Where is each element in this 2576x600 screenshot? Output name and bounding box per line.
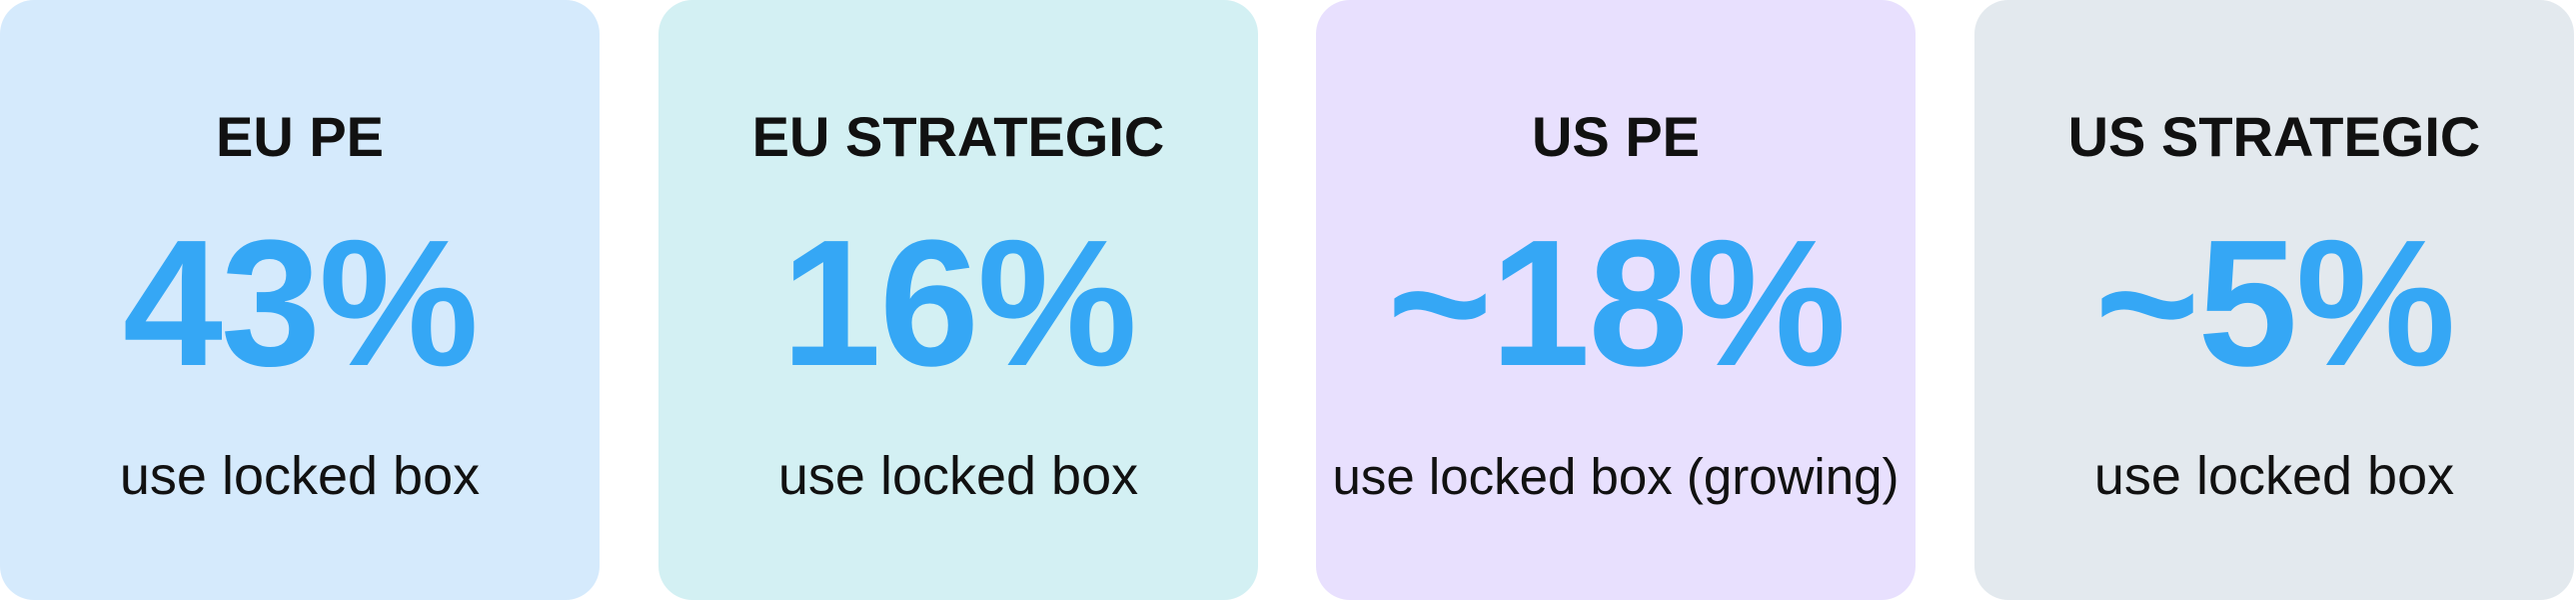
- heading: US STRATEGIC: US STRATEGIC: [2068, 105, 2480, 168]
- panel: US PE: [1316, 0, 1916, 600]
- text: use locked box: use locked box: [778, 446, 1138, 506]
- heading: EU PE: EU PE: [216, 105, 384, 168]
- stat: 16%: 16%: [781, 203, 1135, 404]
- text: use locked box: use locked box: [120, 446, 480, 506]
- text: use locked box (growing): use locked box (growing): [1333, 448, 1899, 505]
- panel: EU PE: [0, 0, 600, 600]
- heading: EU STRATEGIC: EU STRATEGIC: [752, 105, 1164, 168]
- stat: ~18%: ~18%: [1387, 203, 1845, 404]
- heading: US PE: US PE: [1532, 105, 1700, 168]
- panel: US Strategic: [1974, 0, 2574, 600]
- stat: 43%: 43%: [123, 203, 477, 404]
- stat: ~5%: ~5%: [2094, 203, 2454, 404]
- text: use locked box: use locked box: [2094, 446, 2454, 506]
- panel: EU Strategic: [658, 0, 1258, 600]
